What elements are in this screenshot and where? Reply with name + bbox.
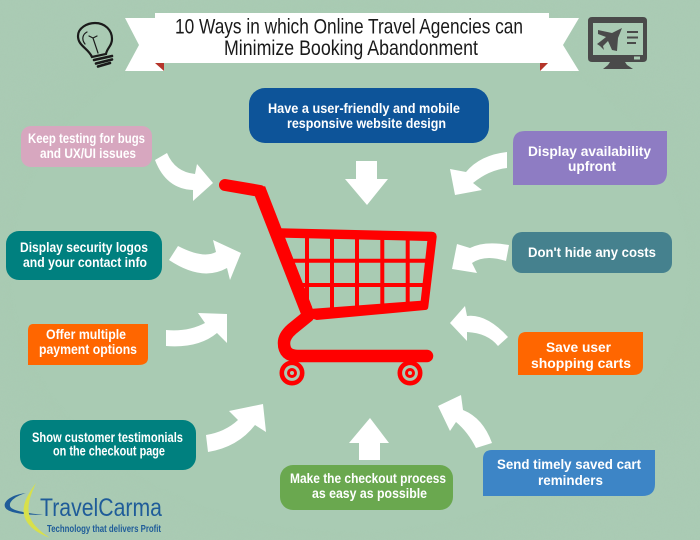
panel: display availability (513, 131, 667, 185)
arrow: save carts (450, 306, 508, 346)
panel: easy checkout: Make the checkout process (290, 470, 446, 486)
arrow: payment options (166, 313, 227, 346)
panel: keep testing: and UX/UI issues (40, 145, 136, 161)
panel: display availability: Display availability (528, 143, 651, 159)
logo: TravelCarma: Technology that delivers Profit (47, 524, 162, 535)
panel: easy checkout: as easy as possible (312, 485, 427, 501)
logo: TravelCarma (5, 483, 162, 538)
panel: saved cart reminders (483, 450, 655, 496)
panel: mobile responsive website: Have a user-friendly and mobile (268, 100, 460, 116)
panel: display availability: upfront (568, 158, 616, 174)
panel: payment options: Offer multiple (46, 326, 126, 342)
panel: easy checkout (280, 465, 453, 510)
arrow: hidden costs (452, 243, 509, 273)
panel: saved cart reminders: Send timely saved cart (497, 456, 641, 472)
panel: save shopping carts (518, 332, 643, 375)
arrow: availability (450, 152, 507, 195)
arrow: top down (345, 161, 388, 205)
title banner (125, 13, 579, 71)
panel: customer testimonials (20, 420, 196, 470)
panel: mobile responsive website (249, 88, 489, 143)
panel: security logos: Display security logos (20, 239, 148, 255)
panel: payment options (28, 324, 148, 365)
panel: hidden costs (512, 232, 672, 273)
icon: computer monitor with airplane (588, 17, 647, 69)
panel: keep testing (21, 126, 152, 167)
title text (175, 16, 523, 60)
panel: customer testimonials: Show customer testimonials (32, 429, 183, 445)
arrow: bottom up (349, 418, 389, 460)
panel: security logos: and your contact info (23, 254, 147, 270)
arrow: security logos (169, 240, 241, 280)
icon: light bulb (78, 23, 112, 66)
icon: shopping cart (225, 185, 437, 383)
arrow: saved cart reminders (438, 395, 492, 448)
title text: Minimize Booking Abandonment (224, 37, 478, 60)
logo: TravelCarma: TravelCarma (40, 494, 162, 522)
panel: security logos (6, 231, 162, 280)
panel: save shopping carts: Save user (546, 339, 612, 355)
panel: payment options: payment options (39, 341, 137, 357)
title text: 10 Ways in which Online Travel Agencies can (175, 16, 523, 38)
panel: keep testing: Keep testing for bugs (28, 130, 145, 146)
panel: hidden costs: Don't hide any costs (528, 244, 656, 260)
panel: save shopping carts: shopping carts (531, 355, 631, 371)
arrow: testimonials (206, 404, 266, 452)
panel: mobile responsive website: responsive website design (287, 115, 446, 131)
arrow: keep testing (155, 153, 213, 201)
panel: saved cart reminders: reminders (538, 472, 603, 488)
panel: customer testimonials: on the checkout page (53, 442, 165, 458)
